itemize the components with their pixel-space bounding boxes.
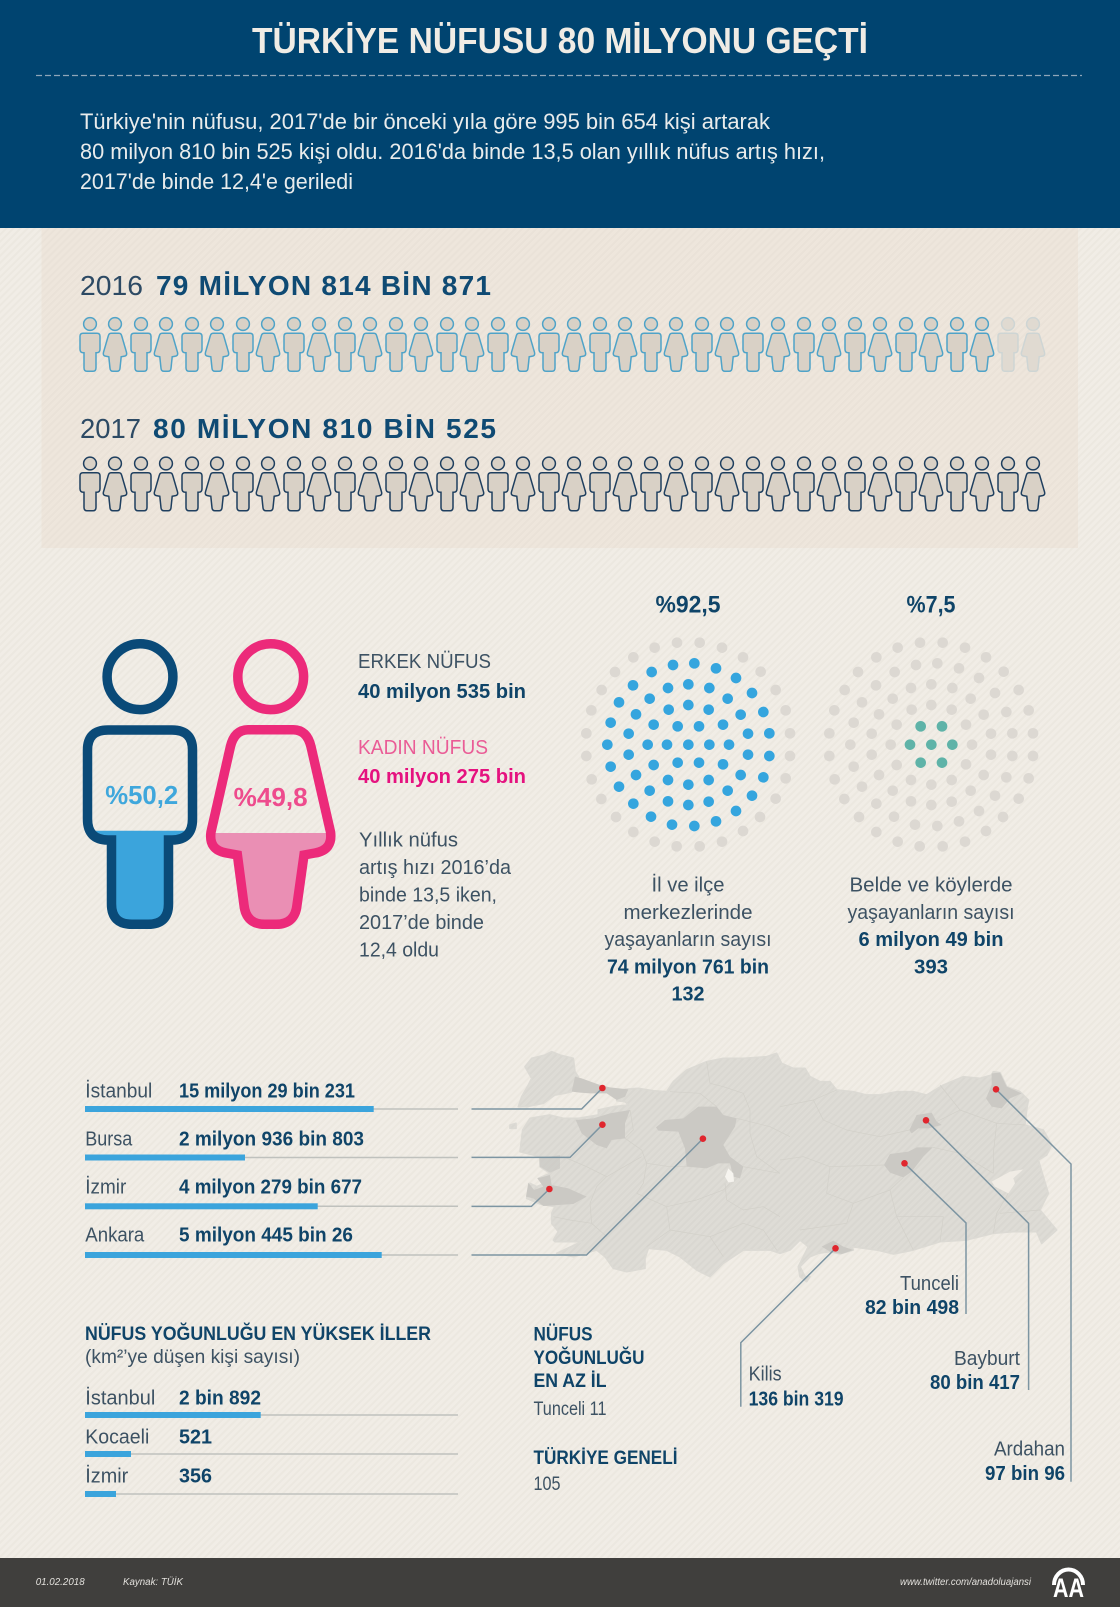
bar: Bursa: 2 milyon 936 bin 803 bbox=[179, 1129, 364, 1151]
bar: İzmir density bbox=[85, 1464, 458, 1497]
bar: İstanbul: 15 milyon 29 bin 231 bbox=[179, 1081, 355, 1103]
panel: population by year bbox=[42, 228, 1078, 548]
text: lowest density: Tunceli 11 bbox=[534, 1399, 606, 1420]
text: female population bbox=[358, 737, 526, 788]
label: Kilis: 136 bin 319 bbox=[749, 1389, 844, 1411]
text: annual growth bbox=[359, 830, 512, 962]
bar: İzmir bbox=[85, 1175, 458, 1209]
label: Ardahan bbox=[985, 1439, 1065, 1485]
text: male population bbox=[358, 651, 526, 703]
heading: highest density bbox=[85, 1323, 431, 1368]
province: Balıkesir area bbox=[539, 1155, 560, 1173]
text: female population: KADIN NÜFUS bbox=[358, 737, 488, 759]
heading: highest density: NÜFUS YOĞUNLUĞU EN YÜKSEK İLLER bbox=[85, 1323, 431, 1345]
province: Kilis bbox=[822, 1241, 853, 1254]
text: lowest density: EN AZ İL bbox=[534, 1371, 607, 1392]
icon: AA logo: AA bbox=[1053, 1573, 1084, 1603]
icon: male figure 50,2%: %50,2 bbox=[105, 780, 178, 810]
caption: rural: Belde ve köylerde bbox=[850, 875, 1012, 897]
caption: rural bbox=[848, 875, 1014, 978]
title: TÜRKİYE NÜFUSU 80 MİLYONU GEÇTİ bbox=[252, 20, 868, 61]
people row: 2017 bbox=[80, 457, 1045, 511]
icon: female figure 49,8%: %49,8 bbox=[234, 782, 308, 812]
intro text: 80 milyon 810 bin 525 kişi oldu. 2016'da binde 13,5 olan yıllık nüfus artış hızı, bbox=[80, 139, 825, 164]
label: Bayburt: 80 bin 417 bbox=[930, 1372, 1020, 1394]
bar: Ankara: 5 milyon 445 bin 26 bbox=[179, 1224, 353, 1246]
caption: urban: yaşayanların sayısı bbox=[604, 929, 772, 951]
text: female population: 40 milyon 275 bin bbox=[358, 766, 526, 788]
caption: urban: merkezlerinde bbox=[624, 902, 752, 924]
heading: highest density: (km²’ye düşen kişi sayısı) bbox=[85, 1347, 300, 1368]
text: lowest density: NÜFUS bbox=[534, 1325, 592, 1346]
heading: 2016: 2016 bbox=[80, 270, 143, 301]
text: lowest density: YOĞUNLUĞU bbox=[534, 1347, 644, 1369]
heading: 2017: 80 MİLYON 810 BİN 525 bbox=[153, 413, 496, 444]
intro text: Türkiye'nin nüfusu, 2017'de bir önceki yıla göre 995 bin 654 kişi artarak bbox=[80, 109, 771, 134]
map of Türkiye bbox=[510, 1052, 1057, 1282]
header panel bbox=[0, 0, 1120, 228]
lake Tuz bbox=[725, 1168, 734, 1182]
heading: 2017: 2017 bbox=[80, 413, 141, 444]
label: Ardahan: Ardahan bbox=[994, 1439, 1065, 1461]
caption: urban: İl ve ilçe bbox=[652, 874, 724, 897]
bar: İstanbul bbox=[85, 1080, 458, 1112]
text: annual growth: 2017’de binde bbox=[359, 912, 484, 934]
bar: İzmir density: İzmir bbox=[85, 1464, 129, 1487]
bar: İzmir: İzmir bbox=[85, 1175, 127, 1198]
heading: 2016: 79 MİLYON 814 BİN 871 bbox=[156, 270, 491, 301]
bar: İstanbul density: İstanbul bbox=[85, 1386, 155, 1409]
text: annual growth: Yıllık nüfus bbox=[359, 830, 458, 852]
bar: Bursa bbox=[85, 1129, 458, 1160]
province: Ankara bbox=[656, 1107, 743, 1178]
people row: 2016 bbox=[80, 318, 1045, 371]
label: Bayburt: Bayburt bbox=[954, 1348, 1020, 1370]
caption: urban: 132 bbox=[672, 984, 704, 1006]
bar chart: most populous provinces bbox=[85, 1080, 458, 1258]
bar: Kocaeli density bbox=[85, 1426, 458, 1457]
bar: İzmir density: 356 bbox=[179, 1465, 212, 1487]
footer: date: 01.02.2018 bbox=[36, 1577, 85, 1588]
bar: Kocaeli density: 521 bbox=[179, 1426, 212, 1448]
text: national average bbox=[534, 1448, 678, 1495]
label: Kilis: Kilis bbox=[749, 1364, 782, 1386]
map pins bbox=[546, 1085, 999, 1252]
label: Tunceli: Tunceli bbox=[900, 1273, 959, 1295]
text: male population: 40 milyon 535 bin bbox=[358, 681, 526, 703]
bar: İstanbul density: 2 bin 892 bbox=[179, 1387, 261, 1409]
caption: rural: yaşayanların sayısı bbox=[848, 902, 1014, 924]
lake Van bbox=[992, 1169, 1023, 1193]
label: Kilis bbox=[749, 1364, 844, 1411]
bar: Ankara bbox=[85, 1224, 458, 1258]
province: İstanbul bbox=[572, 1077, 628, 1100]
province: İzmir bbox=[526, 1175, 587, 1206]
dot chart: rural 7,5% bbox=[824, 591, 1038, 852]
dot chart: rural 7,5%: %7,5 bbox=[906, 591, 956, 618]
bar: Kocaeli density: Kocaeli bbox=[85, 1426, 149, 1448]
province: Tunceli bbox=[884, 1147, 933, 1177]
intro text bbox=[80, 109, 825, 194]
bar: İstanbul: İstanbul bbox=[85, 1080, 152, 1103]
footer: twitter: www.twitter.com/anadoluajansi bbox=[900, 1577, 1032, 1588]
label: Ardahan: 97 bin 96 bbox=[985, 1463, 1065, 1485]
bar: İstanbul density bbox=[85, 1386, 458, 1418]
label: Bayburt bbox=[930, 1348, 1020, 1394]
label: Tunceli bbox=[865, 1273, 959, 1319]
text: lowest density bbox=[534, 1325, 644, 1420]
bar chart: density bbox=[85, 1386, 458, 1497]
intro text: 2017'de binde 12,4'e geriledi bbox=[80, 169, 353, 194]
text: male population: ERKEK NÜFUS bbox=[358, 651, 491, 673]
icon: female figure 49,8% bbox=[211, 644, 331, 924]
caption: rural: 393 bbox=[914, 956, 948, 978]
caption: urban bbox=[604, 874, 772, 1006]
icon: male figure 50,2% bbox=[88, 644, 192, 924]
text: national average: 105 bbox=[534, 1474, 560, 1495]
bar: Ankara: Ankara bbox=[85, 1224, 145, 1246]
footer bbox=[0, 1558, 1120, 1607]
province: Ardahan bbox=[986, 1073, 1022, 1108]
caption: rural: 6 milyon 49 bin bbox=[858, 929, 1004, 951]
text: annual growth: binde 13,5 iken, bbox=[359, 885, 497, 907]
text: annual growth: 12,4 oldu bbox=[359, 940, 439, 962]
province: Bursa bbox=[576, 1110, 630, 1148]
text: national average: TÜRKİYE GENELİ bbox=[534, 1448, 678, 1469]
dot chart: urban 92,5%: %92,5 bbox=[656, 591, 720, 618]
caption: urban: 74 milyon 761 bin bbox=[607, 956, 769, 978]
text: annual growth: artış hızı 2016’da bbox=[359, 857, 512, 879]
province: Bayburt bbox=[909, 1113, 942, 1133]
label: Tunceli: 82 bin 498 bbox=[865, 1297, 959, 1319]
dot chart: urban 92,5% bbox=[581, 591, 795, 852]
footer: source: Kaynak: TÜİK bbox=[123, 1576, 184, 1588]
bar: Bursa: Bursa bbox=[85, 1129, 133, 1151]
bar: İzmir: 4 milyon 279 bin 677 bbox=[179, 1176, 362, 1198]
leader lines: map to labels bbox=[472, 1088, 1071, 1482]
